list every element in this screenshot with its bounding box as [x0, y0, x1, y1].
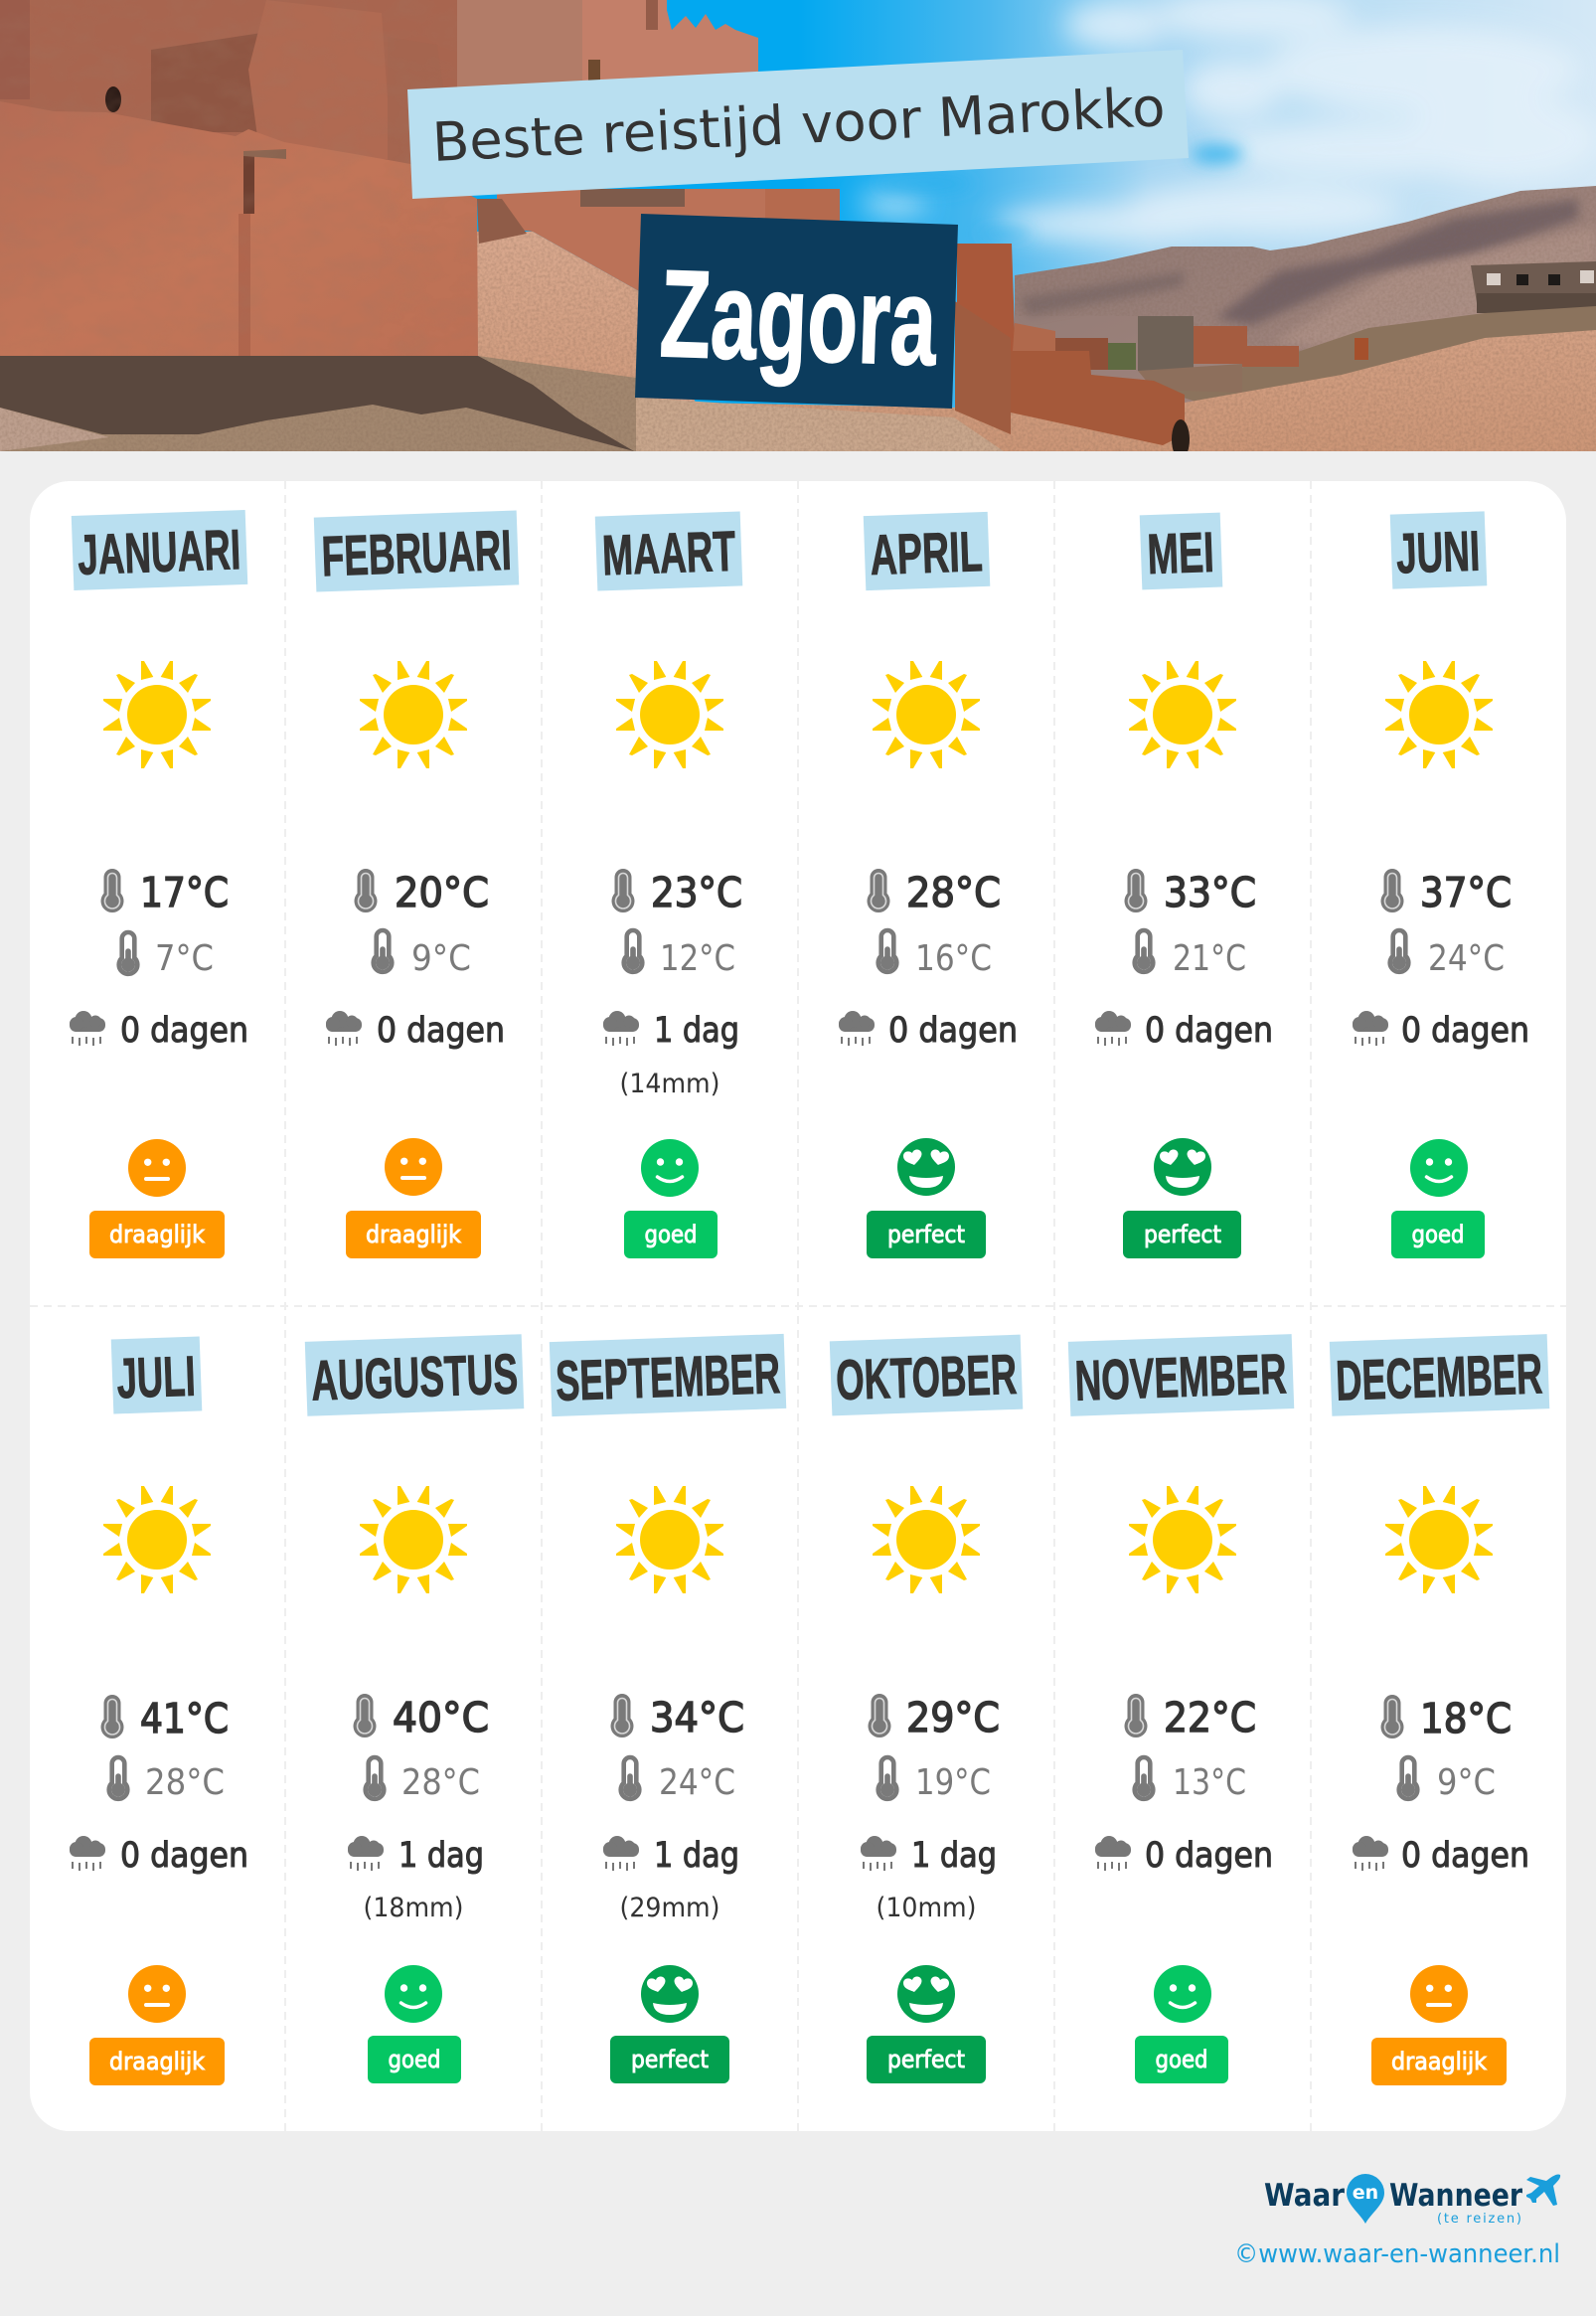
icon: rain cloud [1353, 1836, 1388, 1871]
logo tagline: (te reizen) [1437, 2212, 1521, 2227]
month: november [1068, 1334, 1294, 2083]
icon: rain cloud [839, 1011, 875, 1046]
rating badge [89, 1211, 225, 1258]
icon: thermometer high [354, 869, 378, 912]
high temperature: 37°C [1420, 869, 1512, 916]
icon: sun [1129, 1486, 1236, 1593]
icon: sun [616, 661, 723, 768]
logo word: Waar: Waar [1264, 2178, 1346, 2214]
icon: rain cloud [1095, 1011, 1131, 1046]
icon: sun [1385, 661, 1493, 768]
icon: airplane [1526, 2174, 1560, 2206]
rain days: 0 dagen [377, 1011, 505, 1051]
midground mud walls [955, 244, 1190, 459]
low temperature: 9°C [1437, 1762, 1496, 1803]
icon: thermometer low [1135, 930, 1153, 972]
low temperature: 12°C [660, 938, 735, 979]
title banner [407, 50, 1189, 199]
rain days: 1 dag [654, 1836, 739, 1876]
heading: januari [72, 510, 247, 590]
rating badge [867, 1211, 986, 1258]
icon: rain cloud [1353, 1011, 1388, 1046]
icon: sun [103, 1486, 211, 1593]
rating badge: draaglijk [109, 2048, 205, 2075]
rating badge [346, 1211, 481, 1258]
rating face [1154, 1965, 1211, 2023]
rating badge: perfect [887, 1221, 965, 1248]
heading: mei: MEI [1147, 521, 1215, 586]
heading: april: APRIL [870, 520, 984, 587]
heading: juli [111, 1336, 202, 1414]
high temperature: 34°C [650, 1694, 744, 1741]
rating badge: draaglijk [1391, 2048, 1487, 2075]
heading: maart [595, 511, 742, 591]
icon: rain cloud [861, 1836, 896, 1871]
rain days: 0 dagen [888, 1011, 1018, 1051]
rain days: 0 dagen [1145, 1011, 1273, 1051]
icon: rain cloud [603, 1011, 639, 1046]
heading: oktober [830, 1335, 1023, 1415]
low temperature: 16°C [915, 938, 992, 979]
heading: augustus: AUGUSTUS [310, 1342, 519, 1413]
heading: mei [1140, 513, 1222, 589]
icon: rain cloud [326, 1011, 362, 1046]
hero photo: kasbah in Zagora [0, 0, 1596, 459]
heading: juni: JUNI [1395, 520, 1481, 585]
low temperature: 9°C [411, 938, 471, 979]
panel: climate calendar [30, 481, 1566, 2131]
icon: thermometer high [869, 1694, 890, 1737]
foreground ground [0, 232, 1596, 451]
heading: augustus [305, 1334, 524, 1416]
logo: Waar en Wanneer [1264, 2174, 1560, 2227]
low temperature: 24°C [1428, 938, 1505, 979]
rain millimetres: (14mm) [620, 1069, 719, 1099]
high temperature: 23°C [651, 869, 742, 916]
icon: thermometer high [867, 869, 890, 912]
logo word: Wanneer: Wanneer [1389, 2178, 1523, 2214]
rain days: 1 dag [911, 1836, 997, 1876]
cast shadow on ground [0, 356, 634, 451]
high temperature: 41°C [140, 1695, 229, 1742]
title text: Beste reistijd voor Marokko [431, 76, 1167, 174]
rating badge [624, 1211, 718, 1258]
rating face [128, 1965, 186, 2023]
rating badge [1371, 2038, 1507, 2085]
row: juli to december [70, 1334, 1549, 2085]
rain days: 0 dagen [120, 1836, 248, 1876]
icon: thermometer high [101, 1695, 123, 1738]
rating face [1410, 1965, 1468, 2023]
heading: maart: MAART [601, 520, 736, 587]
icon: sun [1129, 661, 1236, 768]
icon: thermometer low [1390, 930, 1408, 972]
heading: februari [314, 510, 519, 592]
month: april [839, 512, 1018, 1258]
high temperature: 22°C [1164, 1694, 1256, 1741]
heading: april [864, 512, 990, 590]
icon: thermometer low [1399, 1757, 1417, 1799]
icon: sun [103, 661, 211, 768]
high temperature: 40°C [393, 1694, 489, 1741]
rating face [641, 1139, 699, 1197]
heading: juli: JULI [116, 1345, 197, 1410]
rating badge: perfect [887, 2046, 965, 2073]
rain days: 0 dagen [1401, 1836, 1529, 1876]
heading: juni [1390, 511, 1487, 589]
heading: januari: JANUARI [77, 518, 241, 587]
rating face [385, 1965, 442, 2023]
month: september [550, 1334, 786, 2083]
icon: sun [1385, 1486, 1493, 1593]
row: januari to juni [70, 510, 1529, 1258]
rain days: 0 dagen [1401, 1011, 1529, 1051]
icon: rain cloud [1095, 1836, 1131, 1871]
rain days: 0 dagen [1145, 1836, 1273, 1876]
rating badge: goed [1155, 2046, 1208, 2073]
rating badge [1123, 1211, 1241, 1258]
icon: thermometer low [624, 930, 642, 972]
month: december [1330, 1334, 1549, 2085]
heading: november: NOVEMBER [1074, 1342, 1288, 1413]
low temperature: 13°C [1173, 1762, 1246, 1803]
month: februari [314, 510, 519, 1258]
rating face [641, 1965, 699, 2023]
high temperature: 28°C [906, 869, 1001, 916]
icon: thermometer high [1125, 1694, 1147, 1737]
icon: rain cloud [603, 1836, 639, 1871]
rating badge [867, 2036, 986, 2083]
icon: thermometer low [878, 930, 896, 972]
rating face [897, 1138, 955, 1196]
rain days: 0 dagen [120, 1011, 248, 1051]
kasbah walls left [0, 0, 527, 356]
icon: thermometer high [101, 869, 123, 912]
icon: sun [873, 661, 980, 768]
heading: februari: FEBRUARI [321, 519, 513, 588]
rating badge: goed [644, 1221, 698, 1248]
icon: thermometer low [878, 1757, 896, 1799]
icon: sun [616, 1486, 723, 1593]
rain days: 1 dag [654, 1011, 739, 1051]
rating badge: perfect [1144, 1221, 1221, 1248]
high temperature: 33°C [1164, 869, 1256, 916]
month: mei [1095, 513, 1273, 1258]
village buildings [1015, 261, 1596, 403]
heading: oktober: OKTOBER [835, 1343, 1018, 1412]
heading: september [550, 1334, 786, 1416]
rating face [897, 1965, 955, 2023]
icon: thermometer low [621, 1757, 639, 1799]
rear kasbah tower and crenellations [447, 0, 840, 298]
icon: thermometer high [1125, 869, 1147, 912]
icon: thermometer high [612, 869, 634, 912]
rating badge: perfect [631, 2046, 709, 2073]
icon: thermometer low [1135, 1757, 1153, 1799]
city banner [635, 214, 958, 409]
rating face [128, 1139, 186, 1197]
high temperature: 29°C [906, 1694, 1000, 1741]
low temperature: 7°C [155, 938, 214, 979]
low temperature: 24°C [659, 1762, 735, 1803]
icon: rain cloud [348, 1836, 384, 1871]
rating face [1410, 1139, 1468, 1197]
heading: september: SEPTEMBER [555, 1342, 781, 1413]
icon: thermometer high [610, 1694, 634, 1737]
icon: thermometer low [109, 1757, 127, 1799]
icon: thermometer high [1381, 1695, 1403, 1738]
icon: thermometer low [119, 932, 137, 974]
rating face [1154, 1138, 1211, 1196]
icon: sun [873, 1486, 980, 1593]
rating badge: goed [388, 2046, 441, 2073]
icon: sun [360, 1486, 467, 1593]
rain millimetres: (10mm) [877, 1893, 976, 1923]
rating badge: draaglijk [109, 1221, 205, 1248]
icon: map pin [1347, 2174, 1384, 2224]
website credit: ©www.waar-en-wanneer.nl [1234, 2239, 1560, 2269]
icon: sun [360, 661, 467, 768]
rating badge: goed [1411, 1221, 1465, 1248]
sky with clouds [471, 0, 1596, 408]
rain days: 1 dag [399, 1836, 484, 1876]
icon: rain cloud [70, 1011, 105, 1046]
low temperature: 28°C [401, 1762, 480, 1803]
rating badge [610, 2036, 729, 2083]
rating badge [368, 2036, 461, 2083]
high temperature: 17°C [140, 869, 229, 916]
month: maart [595, 511, 742, 1258]
low temperature: 28°C [145, 1762, 225, 1803]
low temperature: 21°C [1173, 938, 1246, 979]
icon: map pin: en [1353, 2182, 1378, 2204]
rain millimetres: (18mm) [364, 1893, 463, 1923]
month: oktober [830, 1335, 1023, 2083]
rating badge: draaglijk [366, 1221, 461, 1248]
icon: thermometer low [366, 1757, 384, 1799]
icon: rain cloud [70, 1836, 105, 1871]
month: juni [1353, 511, 1529, 1258]
icon: thermometer high [1381, 869, 1403, 912]
month: juli [70, 1336, 248, 2085]
month: januari [70, 510, 248, 1258]
high temperature: 20°C [395, 869, 489, 916]
city name: Zagora [658, 245, 940, 392]
rain millimetres: (29mm) [620, 1893, 719, 1923]
icon: thermometer low [374, 930, 392, 972]
low temperature: 19°C [915, 1762, 991, 1803]
rating badge [89, 2038, 225, 2085]
mountains [1015, 186, 1596, 403]
high temperature: 18°C [1420, 1695, 1512, 1742]
rating badge [1391, 1211, 1485, 1258]
icon: thermometer high [354, 1694, 376, 1737]
rating face [385, 1138, 442, 1196]
month: augustus [305, 1334, 524, 2083]
rating badge [1135, 2036, 1228, 2083]
heading: november [1068, 1334, 1294, 1416]
